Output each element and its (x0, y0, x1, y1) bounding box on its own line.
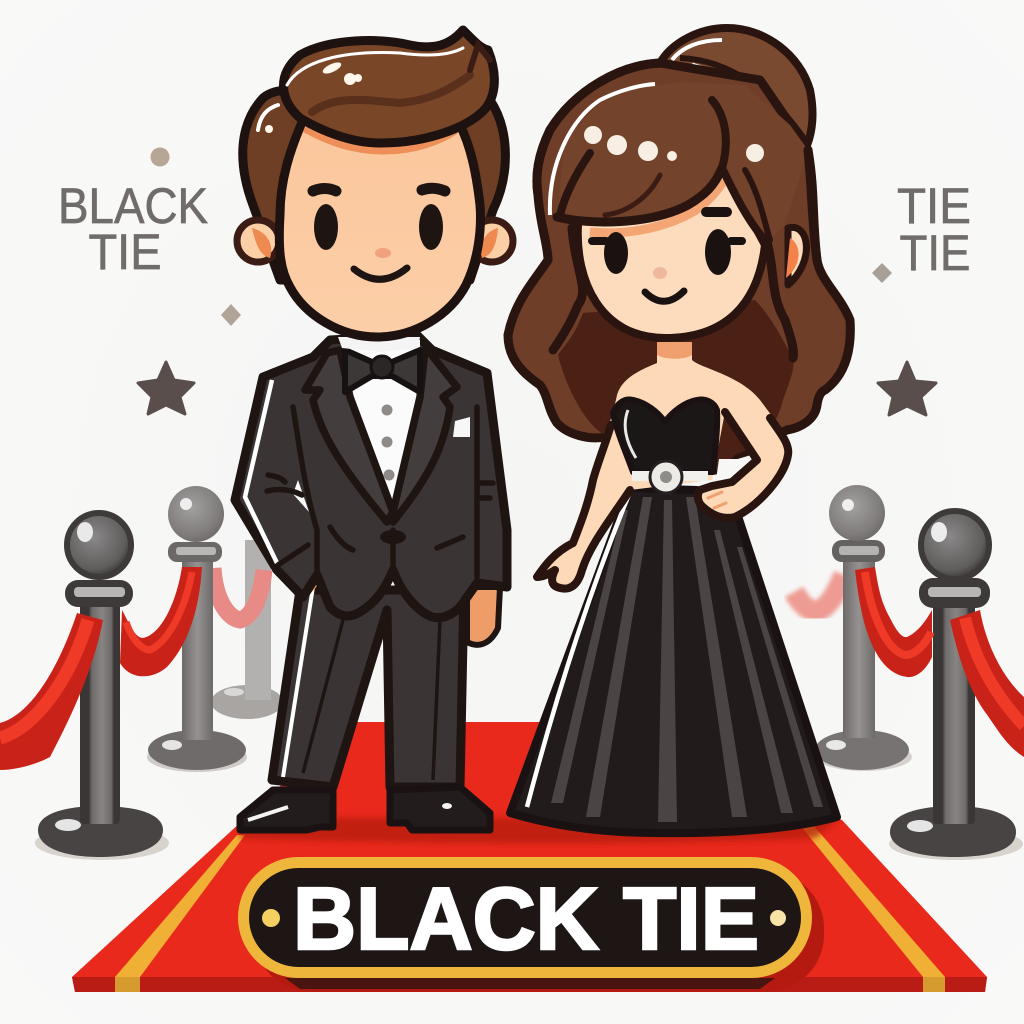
skin: neck, shoulders and arms (537, 345, 788, 589)
back stanchions left (147, 486, 283, 772)
woman (508, 28, 850, 833)
bow tie (345, 350, 420, 392)
forehead shade (305, 128, 455, 150)
man (235, 30, 513, 830)
trousers (272, 590, 464, 787)
hair rim light (550, 84, 655, 215)
face (279, 120, 480, 337)
back hair (243, 80, 505, 280)
neck shade (657, 342, 692, 359)
facial features (592, 212, 742, 301)
shoes (240, 787, 490, 830)
nose and smile (354, 248, 407, 279)
jacket elbow gap (293, 480, 309, 512)
bodice highlight (625, 410, 636, 458)
arm outlines (537, 412, 788, 589)
pocket square (453, 417, 470, 437)
ear (786, 227, 806, 285)
side label: black tie left: BLACK (58, 178, 208, 234)
hair back (508, 63, 850, 470)
side label: tie tie right: TIE (897, 178, 971, 234)
title plaque (244, 862, 806, 972)
hand fingers (708, 492, 726, 508)
fringe (557, 82, 808, 242)
hair highlights (584, 126, 764, 162)
hair shading (258, 45, 490, 130)
jacket white piping (245, 380, 277, 563)
plaque title text: BLACK TIE (293, 869, 759, 968)
hair highlights (265, 60, 362, 133)
face (578, 165, 765, 338)
ears (237, 220, 513, 262)
back stanchions right (794, 485, 912, 771)
side label: tie tie right: TIE (900, 225, 970, 281)
front stanchion left with rope (0, 513, 202, 860)
front stanchion right with rope (855, 511, 1024, 860)
red carpet (72, 722, 987, 992)
belt (632, 471, 708, 481)
eyes and brows (313, 188, 445, 250)
gown pleats (551, 497, 823, 822)
tuxedo jacket (235, 335, 507, 618)
shirt buttons (382, 404, 394, 480)
hair outlines (537, 63, 817, 358)
forehead shade (590, 180, 724, 233)
side label: black tie left (58, 178, 208, 280)
belt buckle (650, 461, 682, 493)
bodice (613, 399, 717, 472)
gown skirt (510, 488, 837, 833)
decorative stars and dots (138, 148, 936, 415)
lapels (305, 350, 457, 522)
trouser stripes and creases (283, 587, 440, 780)
jacket button (380, 530, 406, 544)
side label: black tie left: TIE (88, 224, 162, 280)
shirt (345, 340, 420, 512)
collar (338, 337, 420, 352)
side label: tie tie right (897, 178, 971, 281)
hair bun (660, 28, 812, 150)
waist gap (716, 459, 749, 480)
hair quiff (283, 30, 494, 143)
hands and cuffs (284, 553, 500, 645)
dark hair under chin (558, 300, 793, 470)
gown white edge (527, 492, 630, 807)
jacket seams and pockets (267, 407, 493, 577)
